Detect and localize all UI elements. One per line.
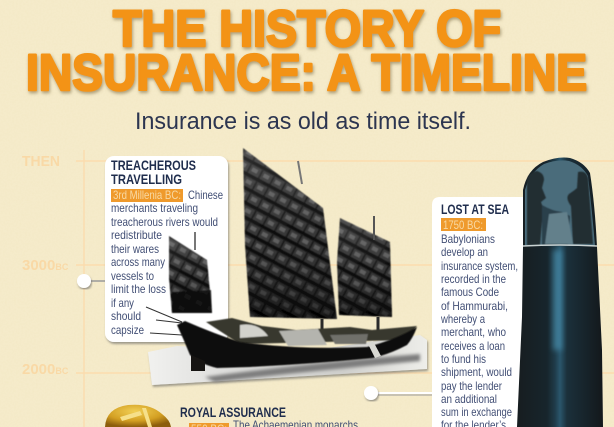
hull band bbox=[367, 341, 381, 358]
body text: merchants traveling bbox=[111, 201, 198, 215]
body text: whereby a bbox=[440, 312, 485, 326]
body text: should bbox=[111, 309, 141, 323]
body text: redistribute bbox=[111, 228, 162, 242]
photo: code of hammurabi stele bbox=[517, 158, 603, 427]
relief base line bbox=[523, 245, 597, 246]
masts bbox=[195, 161, 378, 335]
body text: pay the lender bbox=[441, 379, 502, 393]
card background bbox=[105, 156, 228, 342]
body text: capsize bbox=[111, 323, 144, 337]
date badge: 3rd Millenia BC: bbox=[113, 188, 181, 202]
right sail bbox=[337, 218, 392, 317]
body text: Chinese bbox=[188, 188, 223, 202]
hull bbox=[177, 321, 417, 368]
body text: limit the loss bbox=[111, 282, 166, 296]
title: THE HISTORY OF bbox=[113, 0, 501, 57]
deck cargo bbox=[206, 318, 417, 346]
body text: insurance system, bbox=[441, 259, 518, 273]
body text: an additional bbox=[441, 392, 497, 406]
water shadow streak bbox=[205, 354, 420, 382]
date badge: 1750 BC: bbox=[443, 218, 483, 232]
relief figures bbox=[527, 171, 593, 246]
body text: sum in exchange bbox=[441, 405, 512, 419]
timeline label: 2000 BC: 2000BC bbox=[22, 361, 69, 378]
heading: TRAVELLING bbox=[111, 171, 182, 187]
left sail bbox=[169, 236, 212, 313]
main sail bbox=[243, 148, 337, 319]
body text: their wares bbox=[111, 242, 159, 256]
body text bbox=[111, 188, 223, 337]
subtitle: Insurance is as old as time itself. bbox=[135, 108, 471, 135]
panel: royal assurance bbox=[105, 404, 358, 427]
body text: of Hammurabi, bbox=[441, 299, 508, 313]
body text: famous Code bbox=[441, 285, 499, 299]
card background bbox=[432, 197, 525, 427]
panel: lost at sea bbox=[432, 197, 525, 427]
body text: Babylonians bbox=[441, 232, 495, 246]
rudder post bbox=[191, 355, 205, 371]
connector: treacherous travelling bbox=[77, 274, 106, 288]
timeline label: 3000 BC: 3000BC bbox=[22, 257, 69, 274]
title bbox=[26, 0, 587, 101]
body text: shipment, would bbox=[441, 365, 512, 379]
timeline label: then: THEN bbox=[22, 153, 60, 170]
carved relief panel bbox=[525, 160, 595, 246]
body text: if any bbox=[111, 296, 134, 310]
heading: ROYAL ASSURANCE bbox=[180, 404, 286, 420]
body text: to fund his bbox=[441, 352, 486, 366]
heading: LOST AT SEA bbox=[441, 201, 509, 217]
blue sheen bbox=[553, 250, 562, 350]
photo: chinese junk ship bbox=[146, 148, 427, 385]
body text: treacherous rivers would bbox=[111, 215, 218, 229]
body text bbox=[440, 232, 518, 427]
heading: TREACHEROUS bbox=[111, 157, 196, 173]
timeline axis bbox=[76, 150, 614, 427]
panel: treacherous travelling bbox=[105, 156, 228, 342]
stele body bbox=[517, 158, 603, 427]
rigging bbox=[146, 307, 182, 335]
body text: merchant, who bbox=[441, 325, 506, 339]
body text: recorded in the bbox=[441, 272, 506, 286]
connector: lost at sea bbox=[364, 386, 436, 400]
body text: receives a loan bbox=[441, 339, 505, 353]
body text: develop an bbox=[441, 245, 488, 259]
heading bbox=[111, 157, 196, 187]
water bbox=[148, 335, 427, 385]
body text: across many bbox=[111, 255, 165, 269]
body text: vessels to bbox=[111, 269, 154, 283]
icon: gold coin bbox=[105, 405, 171, 427]
